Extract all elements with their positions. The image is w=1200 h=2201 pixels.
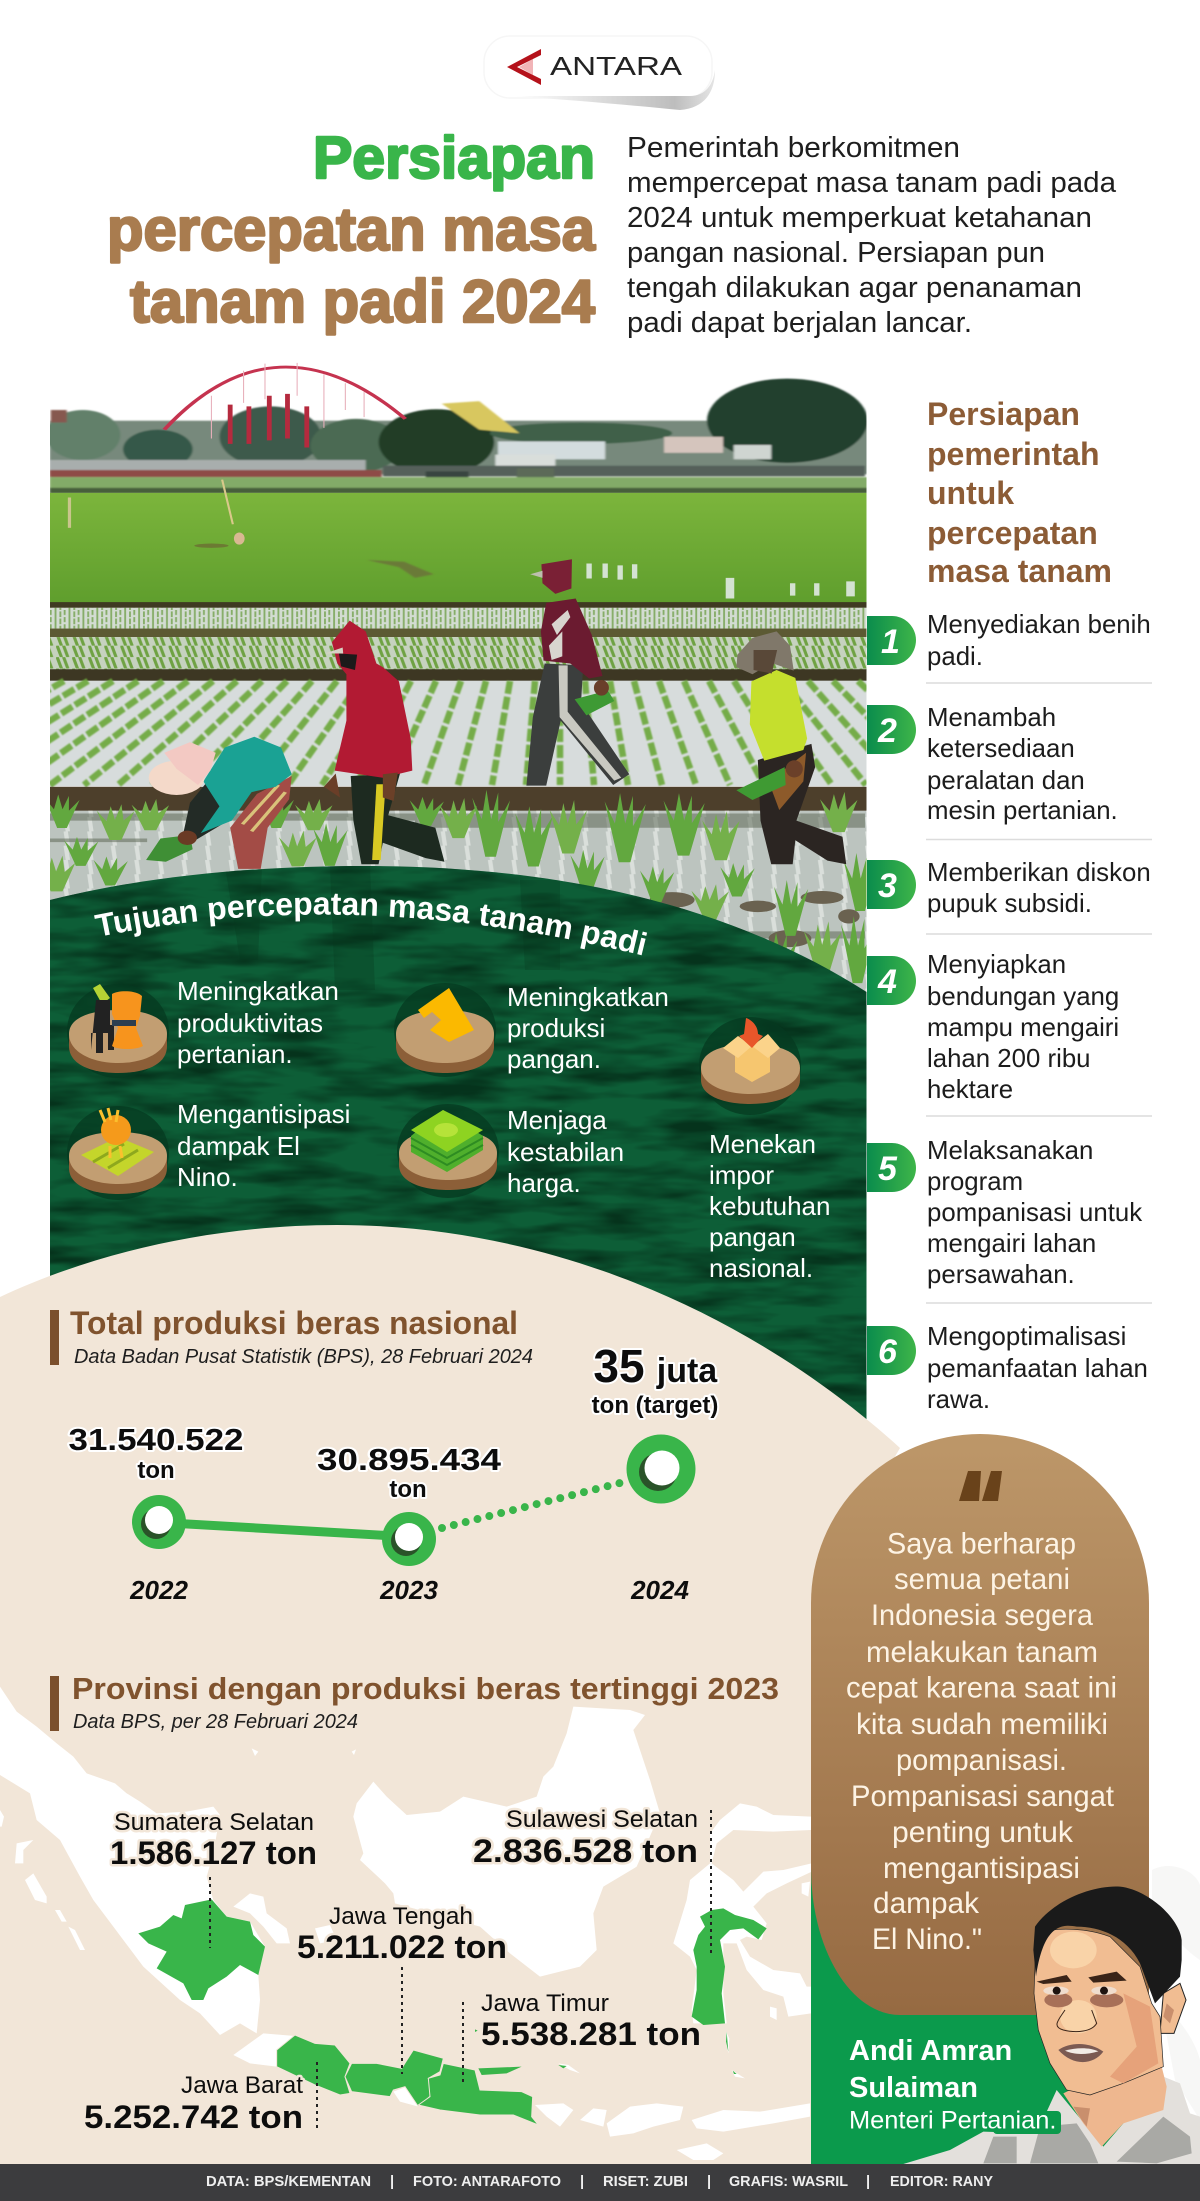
Nusa Tenggara bbox=[535, 2103, 810, 2160]
icon: disc with fertilizer bag and fork bbox=[67, 984, 169, 1078]
province: Jawa Tengah bbox=[345, 2050, 443, 2107]
footer credits bar: | bbox=[390, 2174, 394, 2190]
list: item 5: persawahan. bbox=[927, 1261, 1075, 1289]
heading: total produksi beras nasional: Data Badan Pusat Statistik (BPS), 28 Februari 2024 bbox=[74, 1345, 533, 1368]
right column heading: untuk bbox=[927, 475, 1014, 511]
quote text: El Nino." bbox=[872, 1923, 982, 1956]
list: item 5: pompanisasi untuk bbox=[927, 1199, 1142, 1227]
list: item 2 bbox=[867, 704, 1118, 825]
badge 6: 6 bbox=[878, 1333, 898, 1371]
heading: Tujuan percepatan masa tanam padi: Tujuan percepatan masa tanam padi bbox=[94, 894, 648, 956]
map label: Jawa Tengah: Jawa Tengah bbox=[329, 1903, 473, 1930]
point 2024 bbox=[626, 1434, 696, 1504]
title: tanam padi 2024 bbox=[130, 268, 596, 335]
photo: rice field with four farmers bbox=[50, 362, 866, 992]
year labels: 2023 bbox=[379, 1575, 438, 1605]
heading: total produksi beras nasional bbox=[50, 1305, 533, 1368]
icon: disc with sun and field bbox=[67, 1106, 169, 1200]
year labels: 2024 bbox=[630, 1575, 689, 1605]
quote text: kita sudah memiliki bbox=[856, 1708, 1108, 1741]
intro text: padi dapat berjalan lancar. bbox=[627, 307, 972, 339]
Kalimantan bbox=[353, 1707, 660, 1977]
badge 3 bbox=[867, 860, 916, 909]
text: Menekan impor kebutuhan pangan nasional: pangan bbox=[709, 1222, 796, 1252]
farmer: bending, teal shirt bbox=[146, 737, 292, 869]
list: item 2: ketersediaan bbox=[927, 735, 1075, 763]
map label: Sumatera Selatan: 1.586.127 ton bbox=[110, 1835, 317, 1871]
right column heading: percepatan bbox=[927, 515, 1098, 551]
badge 5 bbox=[867, 1143, 916, 1192]
map label: Jawa Barat: 5.252.742 ton bbox=[84, 2099, 303, 2135]
list: item 4: Menyiapkan bbox=[927, 951, 1066, 979]
list: item 4: mampu mengairi bbox=[927, 1014, 1119, 1042]
heading: provinsi tertinggi bbox=[50, 1671, 779, 1733]
portrait: Andi Amran Sulaiman bbox=[903, 1887, 1200, 2164]
heading: total produksi beras nasional: Total produksi beras nasional bbox=[70, 1305, 518, 1341]
list: item 2: mesin pertanian. bbox=[927, 797, 1118, 825]
right column heading: pemerintah bbox=[927, 436, 1099, 472]
icon: disc with money stack bbox=[397, 1104, 499, 1198]
list: item 5: program bbox=[927, 1168, 1023, 1196]
list: item 3: Memberikan diskon bbox=[927, 859, 1151, 887]
badge 4 bbox=[867, 956, 916, 1005]
list: item 2: Menambah bbox=[927, 704, 1056, 732]
icon: disc with box and arrow bbox=[699, 1017, 801, 1115]
badge 1 bbox=[867, 616, 916, 665]
farmer: maroon jacket bbox=[526, 559, 629, 786]
text: Menekan impor kebutuhan pangan nasional bbox=[709, 1129, 830, 1283]
Sulawesi bbox=[673, 1803, 812, 2023]
point 2023 bbox=[382, 1512, 436, 1566]
cream background panel bbox=[0, 1225, 900, 2165]
list: item 3: pupuk subsidi. bbox=[927, 890, 1092, 918]
text: Meningkatkan produksi pangan: produksi bbox=[507, 1013, 605, 1043]
text: Menekan impor kebutuhan pangan nasional: nasional. bbox=[709, 1253, 813, 1283]
quote text: semua petani bbox=[894, 1563, 1070, 1596]
right column heading: Persiapan bbox=[927, 396, 1080, 432]
list: item 2: peralatan dan bbox=[927, 767, 1085, 795]
province: Jawa Timur bbox=[418, 2063, 538, 2125]
map label: Sulawesi Selatan: Sulawesi Selatan bbox=[506, 1806, 698, 1833]
map label: Jawa Timur: Jawa Timur bbox=[481, 1990, 609, 2017]
footer credits bar: FOTO: ANTARAFOTO bbox=[413, 2174, 561, 2190]
quote text: melakukan tanam bbox=[866, 1636, 1098, 1669]
list: item 6 bbox=[867, 1323, 1148, 1414]
list: item 6: rawa. bbox=[927, 1386, 990, 1414]
footer credits bar: | bbox=[580, 2174, 584, 2190]
quote text: Pompanisasi sangat bbox=[851, 1780, 1115, 1813]
text: Meningkatkan produktivitas pertanian: pertanian. bbox=[177, 1039, 293, 1069]
text: name and title: Sulaiman bbox=[849, 2072, 978, 2104]
title: Persiapan bbox=[313, 125, 595, 191]
list: item 5 bbox=[867, 1137, 1142, 1289]
map label: Jawa Timur: 5.538.281 ton bbox=[481, 2016, 701, 2052]
farmer: red hoodie bbox=[324, 621, 444, 864]
value labels: 35 bbox=[593, 1340, 645, 1392]
text: Mengantisipasi dampak El Nino: Nino. bbox=[177, 1162, 238, 1192]
eastern islands bbox=[353, 1707, 812, 2160]
text: Menekan impor kebutuhan pangan nasional: kebutuhan bbox=[709, 1191, 830, 1221]
western islands bbox=[0, 1687, 443, 2107]
bridge bbox=[164, 363, 405, 447]
text: Mengantisipasi dampak El Nino: dampak El bbox=[177, 1131, 300, 1161]
list: item 5: mengairi lahan bbox=[927, 1230, 1096, 1258]
intro text: Pemerintah berkomitmen bbox=[627, 132, 960, 164]
faint map continuation at right bbox=[1152, 1866, 1200, 2120]
intro text: 2024 untuk memperkuat ketahanan bbox=[627, 202, 1092, 234]
footer credits bar: | bbox=[707, 2174, 711, 2190]
value labels: ton bbox=[389, 1476, 427, 1503]
text: name and title: Menteri Pertanian. bbox=[849, 2106, 1056, 2134]
heading: provinsi tertinggi: Provinsi dengan produksi beras tertinggi 2023 bbox=[72, 1671, 779, 1706]
list: item 5: Melaksanakan bbox=[927, 1137, 1093, 1165]
footer credits bar: | bbox=[866, 2174, 870, 2190]
quote text: Indonesia segera bbox=[871, 1599, 1093, 1632]
value labels: ton bbox=[137, 1457, 175, 1484]
year labels bbox=[129, 1575, 689, 1605]
list: item 4 bbox=[867, 951, 1119, 1104]
list: item 6: pemanfaatan lahan bbox=[927, 1355, 1148, 1383]
footer credits bar: RISET: ZUBI bbox=[603, 2174, 688, 2190]
map label: Sumatera Selatan bbox=[110, 1809, 317, 1871]
map label: Sulawesi Selatan: 2.836.528 ton bbox=[473, 1833, 698, 1869]
logo: ANTARA bbox=[484, 36, 715, 110]
footer credits bar: GRAFIS: WASRIL bbox=[729, 2174, 848, 2190]
map label: Jawa Tengah bbox=[297, 1903, 507, 1965]
map label: Sulawesi Selatan bbox=[473, 1806, 698, 1869]
map label: Jawa Barat: Jawa Barat bbox=[181, 2072, 303, 2099]
value labels: ton (target) bbox=[592, 1392, 718, 1419]
footer credits bar: DATA: BPS/KEMENTAN bbox=[206, 2174, 371, 2190]
text: Meningkatkan produksi pangan bbox=[507, 982, 669, 1074]
intro text: tengah dilakukan agar penanaman bbox=[627, 272, 1082, 304]
badge 5: 5 bbox=[878, 1150, 898, 1188]
text: Meningkatkan produktivitas pertanian: produktivitas bbox=[177, 1008, 323, 1038]
panel: tujuan percepatan masa tanam bbox=[50, 866, 866, 1420]
badge 2: 2 bbox=[877, 712, 897, 750]
rice rows bbox=[50, 678, 866, 787]
right column heading bbox=[927, 396, 1112, 589]
badge 1: 1 bbox=[881, 623, 900, 661]
intro text: pangan nasional. Persiapan pun bbox=[627, 237, 1045, 269]
title bbox=[107, 125, 596, 335]
quote text: penting untuk bbox=[892, 1816, 1074, 1849]
icon: quote mark bbox=[959, 1471, 1002, 1501]
list: item 1 bbox=[867, 611, 1151, 671]
icon: disc with yellow arrow bbox=[394, 983, 496, 1077]
list: item 1: padi. bbox=[927, 643, 983, 671]
text: Menjaga kestabilan harga: kestabilan bbox=[507, 1137, 624, 1167]
footer credits bar: EDITOR: RANY bbox=[890, 2174, 993, 2190]
Sumatra bbox=[0, 1687, 265, 2035]
text: Mengantisipasi dampak El Nino: Mengantisipasi bbox=[177, 1099, 350, 1129]
text: Menekan impor kebutuhan pangan nasional: impor bbox=[709, 1160, 774, 1190]
footer credits bar bbox=[0, 2164, 1200, 2201]
text: Menjaga kestabilan harga: Menjaga bbox=[507, 1105, 607, 1135]
province: Sulawesi Selatan bbox=[692, 1908, 767, 2025]
badge 2 bbox=[867, 705, 916, 754]
text: Menekan impor kebutuhan pangan nasional: Menekan bbox=[709, 1129, 816, 1159]
text: Menjaga kestabilan harga bbox=[507, 1105, 624, 1198]
map label: Jawa Timur bbox=[481, 1990, 701, 2052]
year labels: 2022 bbox=[129, 1575, 188, 1605]
intro text bbox=[627, 132, 1117, 339]
text: name and title: Andi Amran bbox=[849, 2035, 1012, 2067]
panel: quote bbox=[811, 1434, 1149, 2165]
text: Menjaga kestabilan harga: harga. bbox=[507, 1168, 581, 1198]
badge 6 bbox=[867, 1326, 916, 1375]
point 2022 bbox=[132, 1495, 186, 1549]
title: percepatan masa bbox=[107, 196, 596, 263]
badge 3: 3 bbox=[878, 867, 897, 905]
badge 4: 4 bbox=[877, 963, 897, 1001]
farmer: yellow shirt bbox=[736, 631, 846, 864]
list: item 4: bendungan yang bbox=[927, 983, 1119, 1011]
province: Jawa Barat bbox=[277, 2035, 350, 2095]
right column heading: masa tanam bbox=[927, 553, 1112, 589]
list: item 6: Mengoptimalisasi bbox=[927, 1323, 1126, 1351]
quote text bbox=[846, 1528, 1117, 1956]
value labels: 30.895.434 bbox=[317, 1442, 502, 1477]
value labels: 31.540.522 bbox=[68, 1422, 244, 1457]
province: Sumatera Selatan bbox=[138, 1899, 265, 2000]
heading: provinsi tertinggi: Data BPS, per 28 Februari 2024 bbox=[73, 1711, 358, 1733]
list: item 4: hektare bbox=[927, 1076, 1013, 1104]
text: Mengantisipasi dampak El Nino bbox=[177, 1099, 350, 1192]
quote text: Saya berharap bbox=[887, 1528, 1076, 1560]
map label: Sumatera Selatan: Sumatera Selatan bbox=[114, 1809, 314, 1836]
value labels bbox=[68, 1340, 718, 1503]
text: Meningkatkan produksi pangan: pangan. bbox=[507, 1044, 601, 1074]
quote text: pompanisasi. bbox=[896, 1744, 1067, 1777]
Java west and Yogyakarta bbox=[233, 2033, 418, 2107]
text: Meningkatkan produktivitas pertanian bbox=[177, 976, 339, 1069]
line chart: total produksi bbox=[68, 1340, 718, 1605]
list: item 1: Menyediakan benih bbox=[927, 611, 1151, 639]
quote text: dampak bbox=[873, 1887, 980, 1920]
text: Meningkatkan produktivitas pertanian: Meningkatkan bbox=[177, 976, 339, 1006]
map label: Jawa Tengah: 5.211.022 ton bbox=[297, 1929, 507, 1965]
text: Meningkatkan produksi pangan: Meningkatkan bbox=[507, 982, 669, 1012]
intro text: mempercepat masa tanam padi pada bbox=[627, 167, 1117, 199]
map of Indonesia bbox=[0, 1687, 812, 2160]
value labels: juta bbox=[656, 1352, 718, 1390]
list: item 3 bbox=[867, 859, 1151, 918]
list: item 4: lahan 200 ribu bbox=[927, 1045, 1091, 1073]
text: name and title bbox=[849, 2035, 1061, 2134]
quote text: mengantisipasi bbox=[883, 1852, 1080, 1885]
map leader lines bbox=[210, 1810, 711, 2129]
map label: Jawa Barat bbox=[84, 2072, 303, 2135]
quote text: cepat karena saat ini bbox=[846, 1672, 1117, 1704]
logo: ANTARA: ANTARA bbox=[550, 51, 683, 81]
